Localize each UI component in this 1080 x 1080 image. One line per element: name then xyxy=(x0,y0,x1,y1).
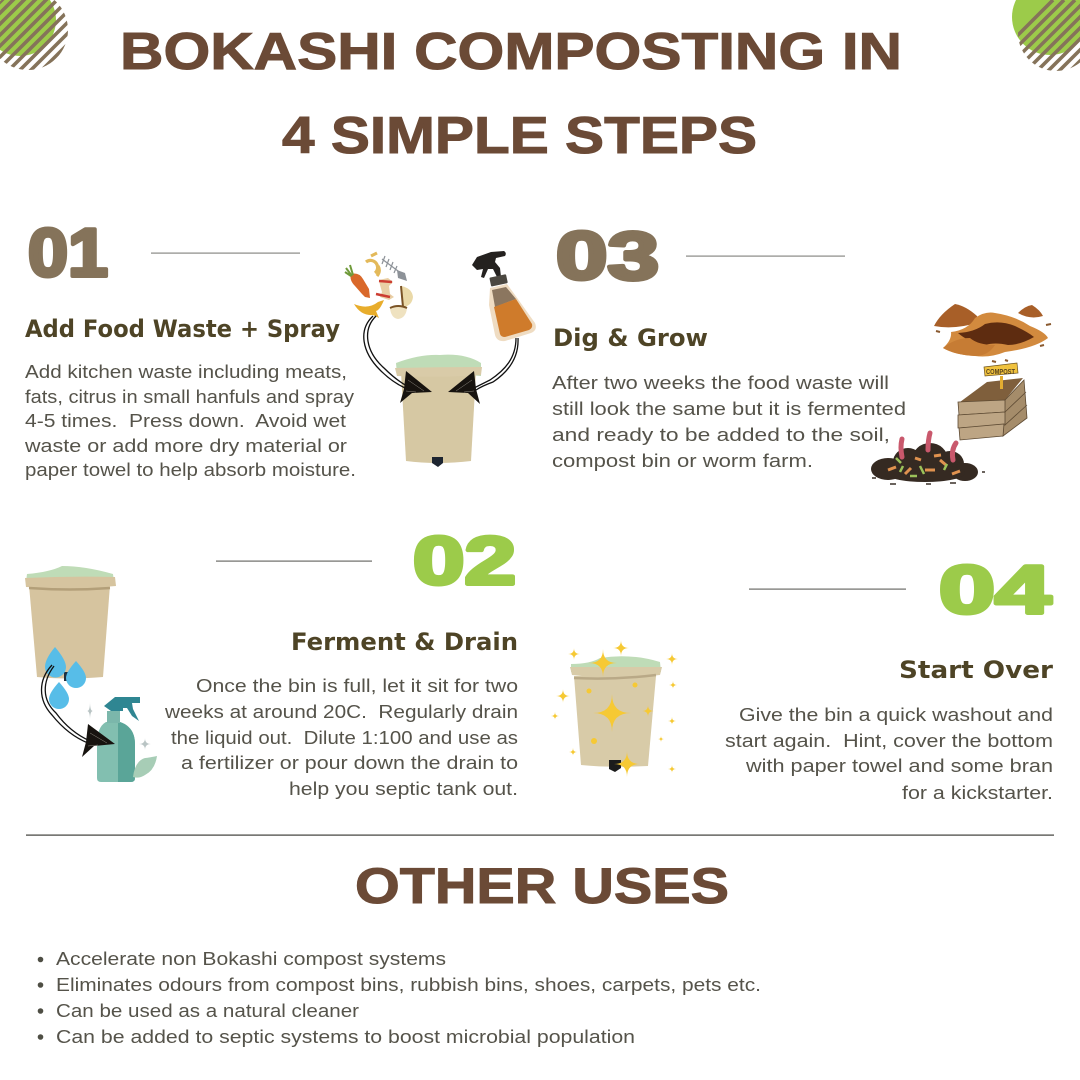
arrow: spray into bin xyxy=(474,338,518,390)
icon: clean bin with sparkles xyxy=(551,640,678,777)
water drops xyxy=(45,647,86,709)
list: other uses: Eliminates odours from compost bins, rubbish bins, shoes, carpets, pets etc. xyxy=(56,974,761,995)
step 04 body text: start again. Hint, cover the bottom xyxy=(725,730,1053,751)
decoration: top-left striped circle xyxy=(0,0,68,70)
step 03 body text: compost bin or worm farm. xyxy=(552,450,813,471)
step 04 body text xyxy=(725,704,1053,803)
decoration: top-right striped circle xyxy=(1012,0,1080,71)
bin xyxy=(25,566,116,681)
bin xyxy=(395,355,482,467)
step number 02: 02 xyxy=(413,523,516,599)
step 01 body text: 4-5 times. Press down. Avoid wet xyxy=(25,410,346,431)
step 02 body text: a fertilizer or pour down the drain to xyxy=(181,752,518,773)
icon: compost crate with sign xyxy=(958,363,1027,440)
step 01 body text: Add kitchen waste including meats, xyxy=(25,361,347,382)
icon: bokashi bin with arrows xyxy=(364,316,518,467)
list: other uses: Can be added to septic systems to boost microbial population xyxy=(56,1026,635,1047)
step 02 body text: Once the bin is full, let it sit for two xyxy=(196,675,518,696)
title: BOKASHI COMPOSTING IN xyxy=(120,23,902,81)
panel: step 01 xyxy=(24,215,356,480)
step 02 body text: weeks at around 20C. Regularly drain xyxy=(164,701,518,722)
step 03 body text: still look the same but it is fermented xyxy=(552,398,906,419)
heading: dig & grow: Dig & Grow xyxy=(553,324,708,352)
icon: spray bottle xyxy=(472,251,536,341)
icon: compost crate with sign: COMPOST xyxy=(986,369,1016,376)
step 03 body text: and ready to be added to the soil, xyxy=(552,424,890,445)
bin xyxy=(570,656,662,772)
sparkles xyxy=(551,640,678,777)
panel: step 02 xyxy=(164,523,518,799)
step 01 body text: paper towel to help absorb moisture. xyxy=(25,459,356,480)
step 03 body text: After two weeks the food waste will xyxy=(552,372,889,393)
step 04 body text: for a kickstarter. xyxy=(902,782,1053,803)
title xyxy=(120,23,902,165)
list: other uses: Can be used as a natural cleaner xyxy=(56,1000,359,1021)
step 03 body text xyxy=(552,372,906,471)
icon: draining bin with drops and arrow xyxy=(25,566,157,782)
panel: step 03 xyxy=(552,218,906,471)
list: other uses: Accelerate non Bokashi compost systems xyxy=(56,948,446,969)
panel: step 04 xyxy=(725,552,1053,803)
icon: food scraps xyxy=(345,253,413,319)
heading: add food waste + spray: Add Food Waste + Spray xyxy=(25,315,340,343)
list: other uses xyxy=(38,948,761,1047)
title: 4 SIMPLE STEPS xyxy=(282,107,757,165)
arrow: food into bin xyxy=(364,316,407,388)
heading: start over: Start Over xyxy=(899,656,1053,684)
icon: worm farm pile xyxy=(871,433,985,484)
step 01 body text: waste or add more dry material or xyxy=(24,435,347,456)
bottle xyxy=(97,697,157,782)
step 01 body text: fats, citrus in small hanfuls and spray xyxy=(25,386,355,407)
icon: dug soil mound xyxy=(934,304,1051,362)
arrow: bin into bottle xyxy=(42,665,90,743)
step 01 body text xyxy=(24,361,356,480)
step 04 body text: Give the bin a quick washout and xyxy=(739,704,1053,725)
heading: other uses: OTHER USES xyxy=(355,858,729,914)
heading: ferment & drain: Ferment & Drain xyxy=(291,628,518,656)
step 04 body text: with paper towel and some bran xyxy=(745,755,1053,776)
step number 03: 03 xyxy=(556,218,659,294)
step 02 body text xyxy=(164,675,518,799)
step 02 body text: help you septic tank out. xyxy=(289,778,518,799)
sparkles xyxy=(87,702,151,750)
step number 01: 01 xyxy=(28,215,108,291)
step number 04: 04 xyxy=(939,552,1051,628)
step 02 body text: the liquid out. Dilute 1:100 and use as xyxy=(171,727,518,748)
